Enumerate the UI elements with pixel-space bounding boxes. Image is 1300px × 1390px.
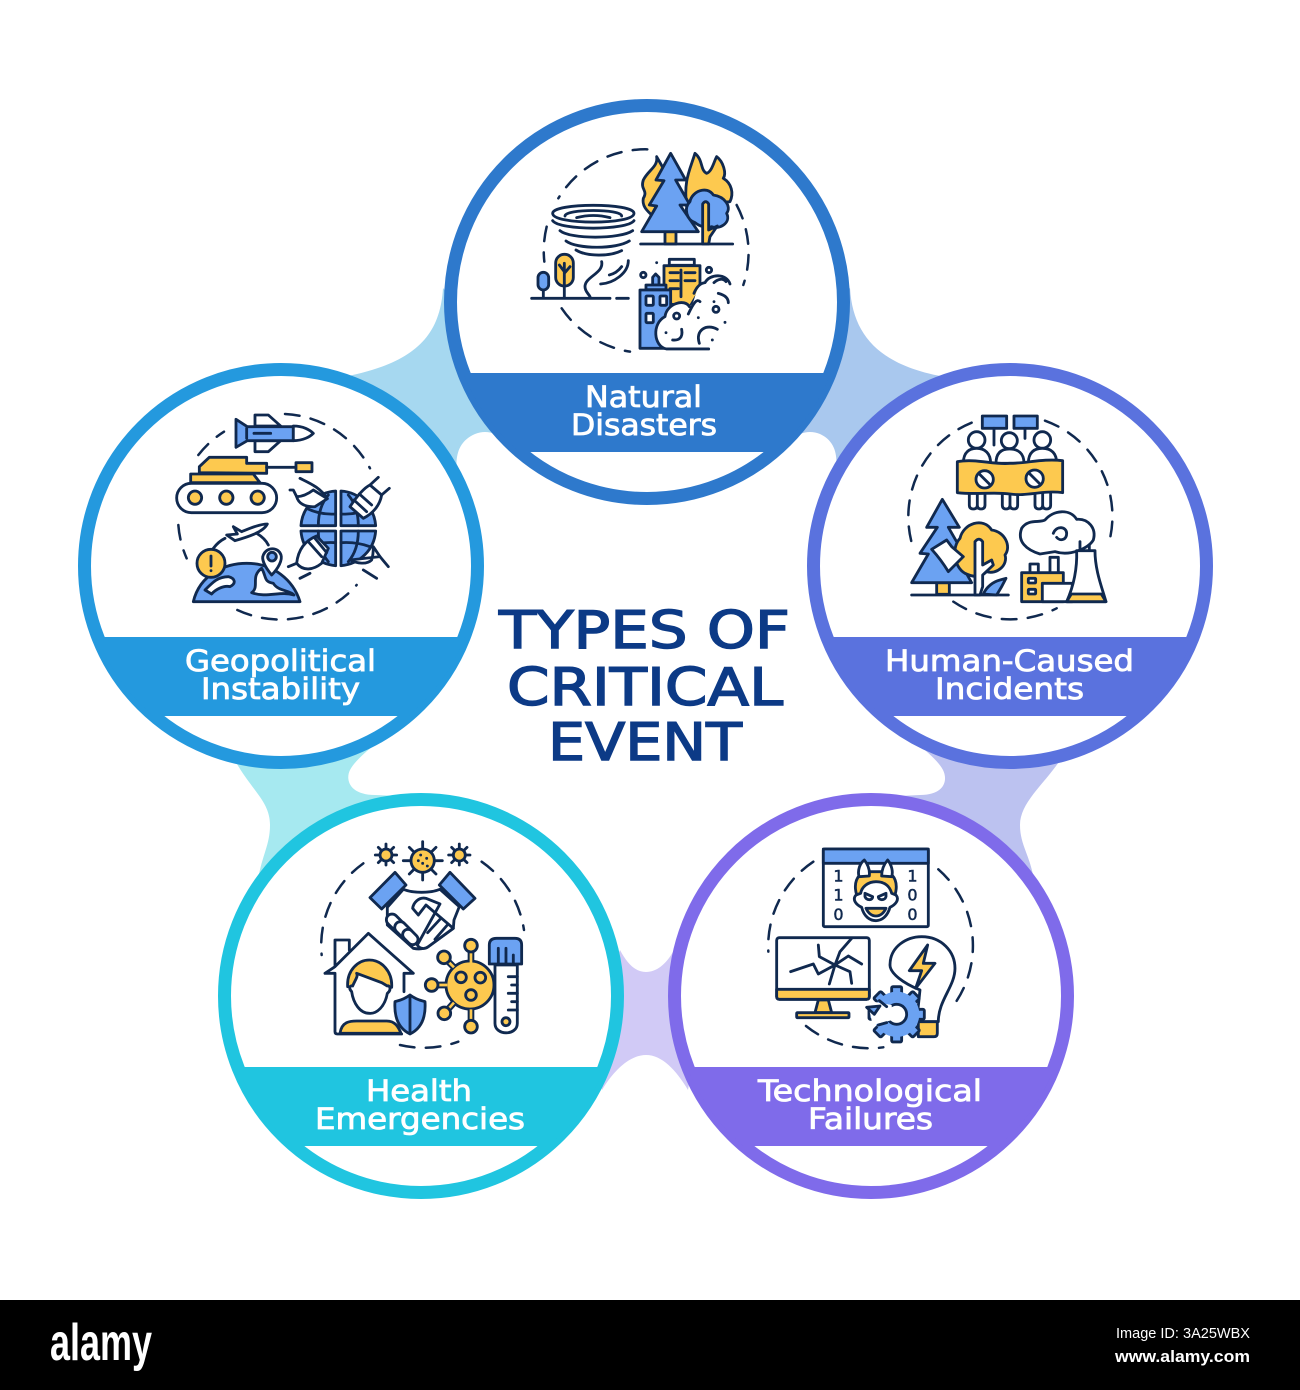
- panel: health emergencies: [215, 800, 627, 1192]
- icon: hacked window, cracked monitor, bulb and gear: 0: [907, 905, 917, 924]
- label band: [470, 373, 824, 452]
- icon: hacked window, cracked monitor, bulb and gear: 1: [833, 886, 843, 905]
- panel: technological failures: [665, 800, 1077, 1192]
- label: Emergencies: [315, 1102, 525, 1136]
- label: Natural: [585, 380, 702, 414]
- label: Disasters: [571, 408, 717, 442]
- connector: geopolitical instability to health emergencies: [232, 740, 420, 880]
- label: Human-Caused: [885, 644, 1134, 678]
- title: TYPES OF: [498, 601, 790, 661]
- title: CRITICAL: [507, 658, 783, 718]
- icon: hacked window, cracked monitor, bulb and gear: 1: [907, 867, 917, 886]
- footer bar: alamy: [50, 1314, 152, 1372]
- label band: [244, 1067, 598, 1146]
- icon: protest, pollution in forest, factory: [908, 416, 1112, 619]
- label: Health: [366, 1074, 472, 1108]
- label band: [104, 637, 458, 716]
- icon: hacked window, cracked monitor, bulb and gear: 0: [907, 886, 917, 905]
- label: Geopolitical: [185, 644, 376, 678]
- title: EVENT: [548, 713, 742, 773]
- connector: health emergencies to technological failures: [590, 950, 700, 1090]
- icon: hacked window, cracked monitor, bulb and gear: 0: [833, 905, 843, 924]
- footer bar: [0, 1300, 1300, 1390]
- icon: tornado, wildfire, smoke over city: [532, 149, 749, 352]
- icon: hacked window, cracked monitor, bulb and gear: 1: [833, 867, 843, 886]
- ring: [674, 800, 1068, 1192]
- connector: natural disasters to human-caused incidents: [765, 288, 952, 532]
- panel: geopolitical instability: [75, 370, 487, 762]
- ring: [224, 800, 618, 1192]
- label: Incidents: [935, 672, 1084, 706]
- ring: [84, 370, 478, 762]
- connector: natural disasters to geopolitical instability: [338, 288, 530, 532]
- label: Technological: [757, 1074, 982, 1108]
- footer bar: Image ID: 3A25WBX: [1116, 1325, 1250, 1342]
- ring: [814, 370, 1206, 762]
- label: Failures: [808, 1102, 933, 1136]
- connector: human-caused incidents to technological failures: [880, 740, 1065, 880]
- icon: hacked window, cracked monitor, bulb and gear: [768, 849, 973, 1048]
- title: [498, 601, 790, 773]
- panel: natural disasters: [440, 106, 854, 498]
- footer bar: www.alamy.com: [1114, 1347, 1250, 1366]
- label: Instability: [201, 672, 360, 706]
- ring: [450, 106, 844, 498]
- label band: [834, 637, 1186, 716]
- label band: [694, 1067, 1048, 1146]
- panel: human-caused incidents: [804, 370, 1216, 762]
- icon: handshake, home isolation, virus, test tube: [321, 842, 524, 1048]
- icon: missile, tank, divided globe, alert map: [177, 414, 389, 620]
